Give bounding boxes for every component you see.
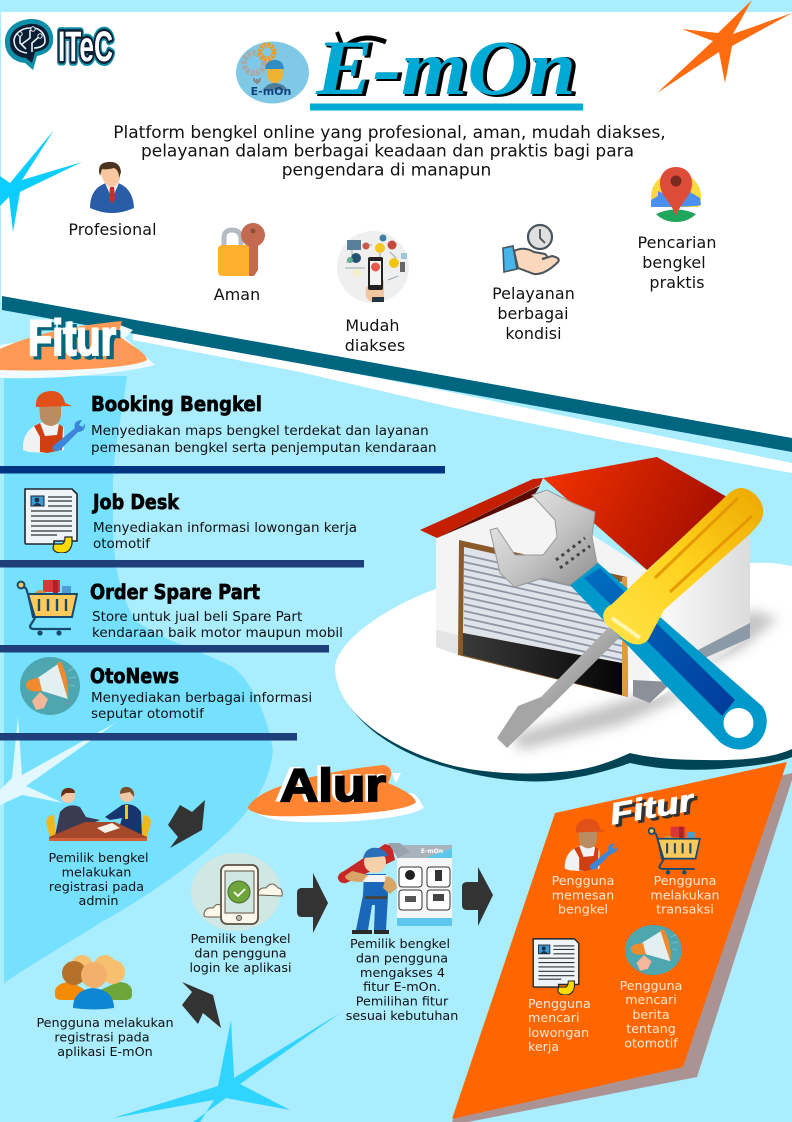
step: access features: Pemilihan fitur <box>356 994 449 1010</box>
arrow: down right <box>168 800 205 848</box>
tool shadows <box>512 610 778 750</box>
title: E-mOn <box>318 25 579 112</box>
screwdriver <box>497 488 763 748</box>
step: access features: fitur E-mOn. <box>363 980 441 995</box>
icon: padlock and key <box>218 223 265 276</box>
step: access features: mengakses 4 <box>360 966 445 981</box>
feature row: Order Spare Part: Order Spare Part <box>90 580 260 604</box>
feature: Pencarian bengkel praktis: praktis <box>649 273 705 292</box>
panel item: job search <box>528 939 591 1054</box>
panel heading <box>607 783 702 834</box>
feature: Mudah diakses: diakses <box>345 336 405 355</box>
panel item: news: berita <box>632 1007 670 1022</box>
intro text: Platform bengkel online yang profesional, aman, mudah diakses, <box>113 123 666 143</box>
icon: meeting <box>46 787 151 841</box>
step: owner registers with admin: registrasi pada <box>49 880 144 895</box>
logo wordmark: ITeC <box>58 23 113 71</box>
step: access features <box>338 843 458 1024</box>
feature row: Booking Bengkel: pemesanan bengkel serta penjemputan kendaraan <box>91 440 437 456</box>
logo: E-mOn badge <box>236 42 309 104</box>
panel item: transaction <box>649 827 720 916</box>
feature: Pelayanan berbagai kondisi: berbagai <box>497 304 569 323</box>
white cloud <box>335 563 792 774</box>
step: user registers: registrasi pada <box>54 1030 150 1046</box>
panel: Fitur summary <box>452 762 792 1122</box>
icon: map pin <box>651 167 701 222</box>
icon: document <box>25 489 77 553</box>
heading blob <box>248 765 416 816</box>
step: owner registers with admin: Pemilik bengkel <box>48 851 148 866</box>
panel item: booking: bengkel <box>558 902 608 916</box>
icon: megaphone <box>625 925 682 975</box>
step: login: Pemilik bengkel <box>190 932 290 947</box>
step: login <box>189 853 292 976</box>
arrow: up right <box>182 982 221 1028</box>
icon: phone with apps <box>337 231 409 303</box>
title underline <box>310 104 583 110</box>
icon: mechanic with app screen: E-mOn <box>421 848 443 855</box>
diagonal teal band <box>2 296 792 452</box>
panel item: booking: memesan <box>552 888 614 902</box>
intro text: pelayanan dalam berbagai keadaan dan praktis bagi para <box>141 142 634 162</box>
arrow: to features panel <box>462 867 493 926</box>
garage walls <box>436 497 750 703</box>
diagonal white strip <box>133 331 792 473</box>
feature row: Booking Bengkel: Menyediakan maps bengkel terdekat dan layanan <box>91 423 429 439</box>
panel item: news: otomotif <box>624 1036 678 1050</box>
illustration: garage with wrench and screwdriver <box>420 457 778 750</box>
feature row: OtoNews: OtoNews <box>90 664 179 688</box>
panel heading: Fitur <box>611 786 702 834</box>
icon: document <box>533 939 579 995</box>
step: user registers <box>36 955 174 1060</box>
feature row: Order Spare Part <box>18 580 343 641</box>
feature: Aman <box>214 223 265 304</box>
logo: E-mOn badge: E-mOn <box>251 85 291 98</box>
icon: shopping cart <box>18 580 77 636</box>
step: owner registers with admin: melakukan <box>62 866 131 880</box>
cloud shadow <box>337 680 792 782</box>
feature row: Job Desk <box>25 489 357 553</box>
panel heading: Fitur <box>607 784 699 831</box>
step: user registers: Pengguna melakukan <box>36 1016 174 1031</box>
feature row: OtoNews <box>20 657 312 722</box>
feature row: Order Spare Part: Store untuk jual beli Spare Part <box>92 609 302 625</box>
step: access features: Pemilik bengkel <box>350 937 450 952</box>
feature: Mudah diakses <box>337 231 409 355</box>
feature row: OtoNews: Menyediakan berbagai informasi <box>91 690 312 706</box>
feature row: Order Spare Part: kendaraan baik motor maupun mobil <box>92 625 343 641</box>
feature: Aman: Aman <box>214 285 260 304</box>
feature: Mudah diakses: Mudah <box>345 316 400 335</box>
heading blob <box>0 321 147 371</box>
panel body <box>452 762 787 1119</box>
step: access features: sesuai kebutuhan <box>346 1009 458 1024</box>
panel item: booking: Pengguna <box>552 873 614 888</box>
step: owner registers with admin <box>46 787 151 909</box>
icon: mechanic <box>565 819 617 871</box>
decorative star: pale <box>0 717 117 805</box>
feature: Pelayanan berbagai kondisi: kondisi <box>505 324 562 343</box>
star: blue left <box>0 130 82 232</box>
panel item: job search: mencari <box>528 1010 580 1025</box>
heading: Alur: Alur <box>280 759 386 811</box>
logo wordmark <box>58 23 113 71</box>
feature row: Job Desk: otomotif <box>93 536 151 552</box>
heading: Fitur: Fitur <box>28 310 116 366</box>
panel item: transaction: transaksi <box>656 902 714 916</box>
arrow: right <box>297 873 328 933</box>
icon: mechanic with app screen <box>338 843 452 934</box>
icon: megaphone <box>20 657 80 715</box>
feature: Pelayanan berbagai kondisi <box>492 225 575 343</box>
panel item: job search: lowongan <box>528 1025 589 1040</box>
feature row: Booking Bengkel: Booking Bengkel <box>91 392 262 416</box>
heading blob shadow <box>0 325 155 378</box>
intro text <box>113 123 666 180</box>
heading: Alur: Alur <box>276 758 384 810</box>
feature row: Booking Bengkel <box>23 391 437 456</box>
adjustable wrench <box>490 490 767 749</box>
icon: user group <box>55 955 132 1010</box>
heading: Fitur <box>0 310 155 378</box>
icon: hand with clock <box>503 225 559 274</box>
panel item: job search: Pengguna <box>528 996 591 1011</box>
step: access features: dan pengguna <box>356 952 448 966</box>
feature row: Job Desk: Menyediakan informasi lowongan kerja <box>93 520 357 536</box>
panel item: booking <box>552 819 617 916</box>
heading: Alur <box>248 758 424 822</box>
feature: Profesional: Profesional <box>68 220 157 239</box>
icon: cart <box>649 827 700 875</box>
feature row: OtoNews: seputar otomotif <box>91 706 205 722</box>
feature: Pencarian bengkel praktis <box>638 167 716 292</box>
panel item: news: mencari <box>625 992 677 1007</box>
feature: Pencarian bengkel praktis: Pencarian <box>638 233 716 252</box>
panel item: transaction: melakukan <box>650 888 720 902</box>
feature: Pencarian bengkel praktis: bengkel <box>642 253 706 272</box>
heading: Fitur: Fitur <box>32 313 120 369</box>
intro text: pengendara di manapun <box>282 160 491 180</box>
feature: Pelayanan berbagai kondisi: Pelayanan <box>492 284 575 303</box>
garage door <box>458 540 628 697</box>
logo: ITeC <box>5 19 113 71</box>
step: user registers: aplikasi E-mOn <box>57 1045 153 1060</box>
panel item: news: tentang <box>626 1021 676 1036</box>
lower background blob <box>4 376 273 983</box>
panel item: news: Pengguna <box>620 978 682 993</box>
star: blue bottom <box>113 1013 340 1122</box>
panel item: job search: kerja <box>528 1039 559 1054</box>
feature row: Job Desk: Job Desk <box>91 490 180 514</box>
step: owner registers with admin: admin <box>79 894 118 909</box>
logo brain badge <box>5 19 53 70</box>
panel item: transaction: Pengguna <box>654 873 716 888</box>
step: login: login ke aplikasi <box>189 961 292 976</box>
heading blob shadow <box>257 793 424 822</box>
title: E-mOn <box>315 24 576 111</box>
icon: businessman <box>90 162 134 213</box>
feature: Profesional <box>68 162 157 239</box>
icon: phone login <box>191 853 282 931</box>
icon: mechanic <box>23 391 85 453</box>
logo wordmark: ITeC <box>58 23 113 71</box>
panel shadow <box>452 773 792 1122</box>
star: orange top right <box>657 0 792 93</box>
panel item: news <box>620 925 682 1050</box>
garage roof <box>420 457 727 570</box>
step: login: dan pengguna <box>194 946 287 962</box>
